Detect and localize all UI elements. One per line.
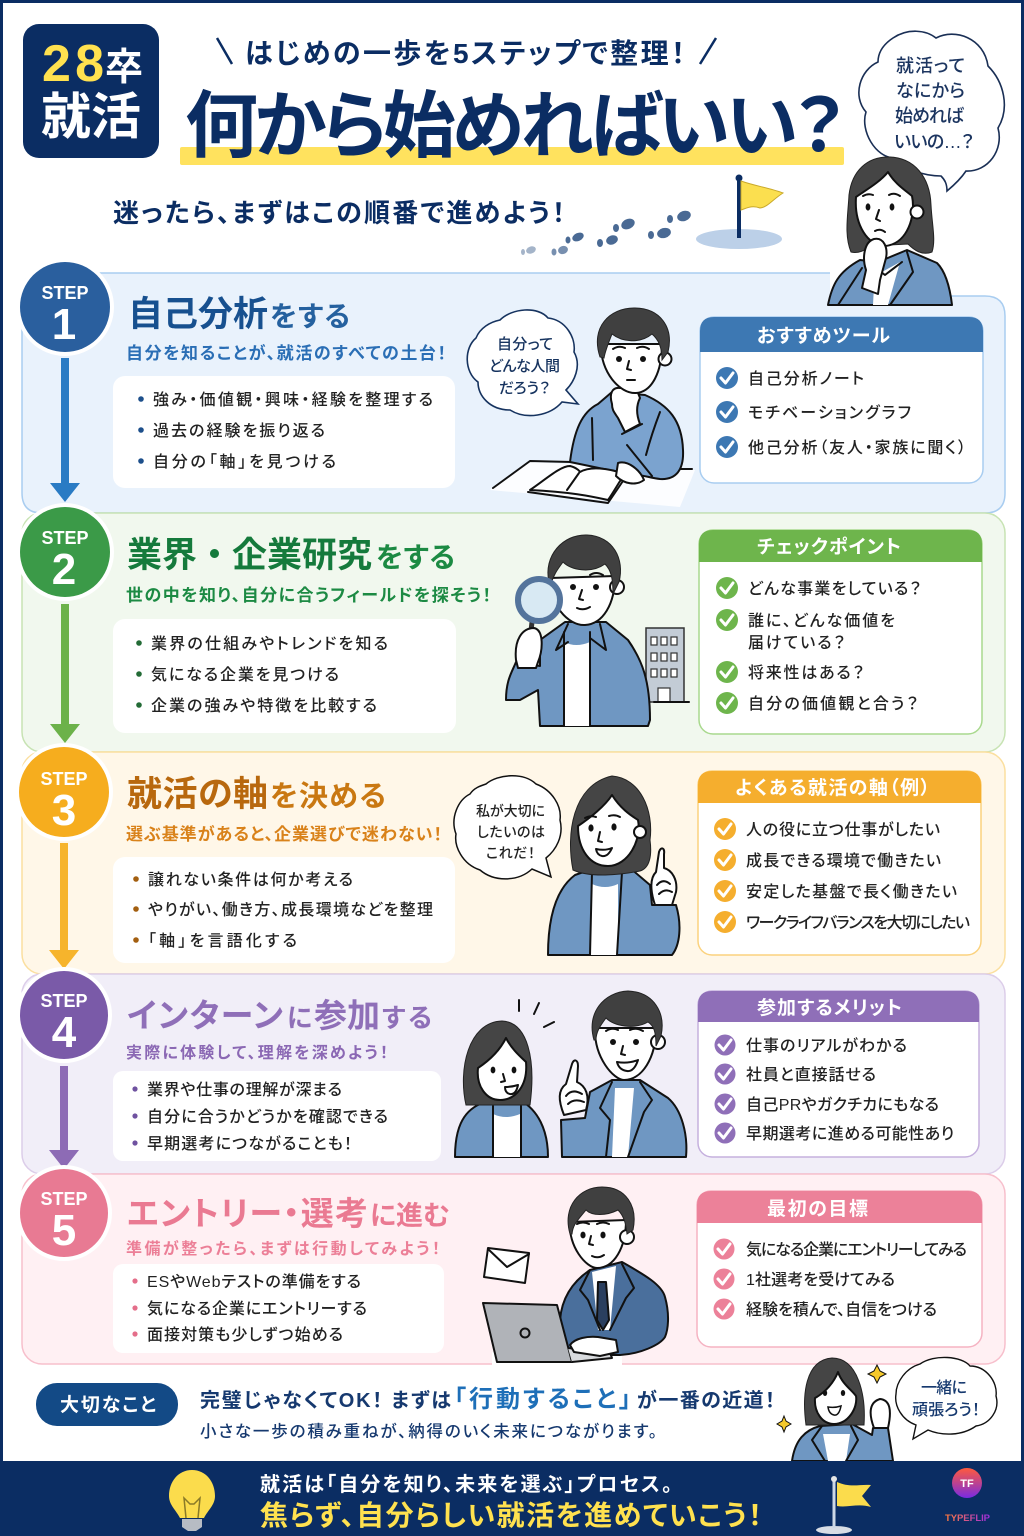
arrow: step 1 to 2 (50, 358, 80, 502)
card: おすすめツール: モチベーショングラフ (748, 404, 911, 422)
panel: step 2 background (22, 513, 1005, 752)
card: よくある就活の軸（例）: 人の役に立つ仕事がしたい (746, 820, 940, 839)
step 1 subheading: 自分を知ることが、就活のすべての土台！ (126, 343, 446, 363)
step 1 list: 自分の「軸」を見つける (153, 453, 336, 471)
panel: step 4 background (22, 974, 1005, 1174)
step 5 list (113, 1264, 444, 1353)
icon: top thought bubble: 就活って (896, 56, 965, 76)
icon: top thought bubble: なにから (896, 81, 965, 101)
step 2 list: 企業の強みや特徴を比較する (151, 697, 377, 715)
badge: 28卒就活 (23, 24, 159, 158)
step 3 list: 譲れない条件は何か考える (148, 871, 353, 889)
step 5 list: ESやWebテストの準備をする (147, 1273, 361, 1291)
icon: bubble 自分ってどんな人間だろう？: だろう？ (499, 380, 550, 397)
step 4 heading: 参加 (314, 997, 380, 1034)
card: よくある就活の軸（例）: よくある就活の軸（例） (735, 777, 930, 799)
title with highlight: 何から始めればいい？ (185, 86, 845, 167)
card: チェックポイント: チェックポイント (757, 535, 901, 558)
step 2 subheading: 世の中を知り、自分に合うフィールドを探そう！ (126, 585, 491, 605)
card: 最初の目標 (697, 1191, 982, 1347)
message: 完璧じゃなくてOK: 小さな一歩の積み重ねが、納得のいく未来につながります。 (200, 1421, 657, 1441)
card: おすすめツール (700, 317, 983, 483)
card: チェックポイント: 自分の価値観と合う？ (748, 695, 918, 713)
icon: bubble 自分ってどんな人間だろう？ (467, 310, 578, 416)
step 3 heading: を決める (270, 780, 386, 813)
step 4 badge: STEP (40, 991, 88, 1011)
icon: footer flag (816, 1476, 871, 1534)
card: 参加するメリット: 仕事のリアルがわかる (746, 1036, 907, 1055)
step 5 heading: に進む (370, 1201, 450, 1231)
step 3 list: やりがい、働き方、成長環境などを整理 (148, 900, 433, 919)
step 3 subheading: 選ぶ基準があると、企業選びで迷わない！ (126, 824, 442, 844)
character: man thinking with book (490, 308, 695, 507)
character: woman and man discussing (455, 991, 686, 1157)
card: チェックポイント: 将来性はある？ (748, 664, 864, 682)
step 5 heading: エントリー・選考 (127, 1195, 368, 1232)
character: man in suit with laptop and envelope (483, 1187, 668, 1366)
step 4 subheading: 実際に体験して、理解を深めよう！ (126, 1044, 388, 1062)
icon: bubble 私が大切にしたいのはこれだ！: 私が大切に (476, 803, 545, 819)
card: 参加するメリット: 自己PRやガクチカにもなる (746, 1096, 939, 1114)
step 4 list (113, 1071, 441, 1161)
step 3 list (113, 857, 455, 963)
step 4 heading: に (287, 1003, 312, 1033)
pill: 大切なこと (36, 1383, 178, 1426)
subtitle: 迷ったら、まずはこの順番で進めよう！ (113, 198, 565, 228)
step 5 badge (16, 1165, 112, 1261)
bubble: 一緒に頑張ろう！: 一緒に (921, 1379, 967, 1397)
card: 参加するメリット: 参加するメリット (757, 997, 902, 1019)
icon: top thought bubble: いいの…？ (894, 132, 974, 152)
card: よくある就活の軸（例）: 安定した基盤で長く働きたい (746, 883, 957, 901)
step 2 heading: 業界・企業研究 (127, 536, 372, 575)
footer message (260, 1473, 762, 1531)
logo: TYPEFLIP (945, 1468, 991, 1524)
step 4 badge (16, 967, 112, 1063)
step 5 badge: STEP (40, 1189, 88, 1209)
step 1 badge: STEP (41, 283, 89, 303)
step 1 heading (128, 295, 350, 334)
step 1 heading: をする (270, 301, 350, 332)
icon: bubble 自分ってどんな人間だろう？: 自分って (497, 336, 553, 353)
icon: bubble 私が大切にしたいのはこれだ！ (454, 776, 561, 879)
step 5 list: 面接対策も少しずつ始める (147, 1326, 343, 1344)
card: チェックポイント (699, 530, 982, 734)
card: 最初の目標: 気になる企業にエントリーしてみる (746, 1241, 967, 1259)
tagline: はじめの一歩を5ステップで整理！ (245, 38, 685, 69)
logo: TYPEFLIP: TF (960, 1478, 974, 1490)
card: 最初の目標: 経験を積んで、自信をつける (746, 1301, 937, 1319)
step 2 list: 気になる企業を見つける (151, 666, 339, 684)
message: 完璧じゃなくてOK: 完璧じゃなくてOK！ まずは (200, 1389, 451, 1412)
icon: bubble 私が大切にしたいのはこれだ！: したいのは (477, 824, 545, 840)
step 2 heading: をする (376, 542, 455, 573)
step 4 list: 早期選考につながることも！ (147, 1134, 352, 1153)
step 1 list (113, 376, 455, 488)
step 1 badge: 1 (52, 300, 76, 349)
step 3 heading: 就活の軸 (127, 775, 268, 814)
message: 完璧じゃなくてOK: が一番の近道！ (637, 1388, 775, 1412)
icon: top thought bubble: 始めれば (895, 106, 965, 126)
pill: 大切なこと: 大切なこと (60, 1394, 156, 1416)
character: thinking woman (828, 157, 952, 305)
character: woman pointing up (548, 776, 679, 955)
step 4 list: 業界や仕事の理解が深まる (147, 1080, 342, 1099)
logo: TYPEFLIP: TYPEFLIP (945, 1513, 991, 1524)
icon: light bulb (169, 1470, 215, 1531)
icon: footprints and goal flag (521, 174, 783, 256)
step 1 heading: 自己分析 (128, 295, 268, 334)
step 1 list: 過去の経験を振り返る (153, 422, 325, 440)
step 2 list (113, 619, 456, 733)
footer band (0, 1461, 1024, 1536)
step 5 list: 気になる企業にエントリーする (147, 1300, 367, 1318)
card: チェックポイント: 誰に、どんな価値を (748, 612, 895, 630)
step 4 heading: インターン (127, 997, 283, 1034)
card: 最初の目標: 1社選考を受けてみる (746, 1270, 895, 1289)
icon: bubble 私が大切にしたいのはこれだ！: これだ！ (486, 845, 535, 861)
panel: step 3 background (22, 752, 1005, 974)
badge: 28卒就活: 28 (42, 35, 104, 93)
card: 参加するメリット: 社員と直接話せる (746, 1066, 876, 1084)
step 2 badge: STEP (41, 528, 89, 548)
step 4 heading: する (382, 1003, 432, 1033)
character: cheering woman with sparkles and bubble (777, 1358, 893, 1461)
step 4 list: 自分に合うかどうかを確認できる (147, 1108, 388, 1126)
bubble: 一緒に頑張ろう！: 頑張ろう！ (912, 1401, 980, 1419)
step 2 badge: 2 (52, 545, 76, 594)
step 1 badge (16, 258, 114, 356)
arrow: step 4 to 5 (49, 1066, 79, 1169)
step 3 list: 「軸」を言語化する (148, 932, 297, 950)
card: よくある就活の軸（例） (698, 771, 981, 955)
panel: step 5 background (22, 1174, 1005, 1364)
step 1 list: 強み・価値観・興味・経験を整理する (153, 391, 433, 409)
step 2 list: 業界の仕組みやトレンドを知る (151, 635, 388, 653)
card: おすすめツール: おすすめツール (757, 325, 890, 347)
footer message: 就活は「自分を知り、未来を選ぶ」プロセス。 (260, 1473, 672, 1496)
message: 完璧じゃなくてOK: 「行動すること」 (454, 1386, 631, 1413)
step 3 badge (15, 743, 113, 841)
panel: step 1 background (22, 273, 1005, 513)
card: おすすめツール: 他己分析（友人・家族に聞く） (748, 439, 966, 457)
card: チェックポイント: 届けている？ (748, 635, 845, 652)
card: おすすめツール: 自己分析ノート (748, 370, 864, 388)
step 3 badge: STEP (40, 769, 88, 789)
message: 完璧じゃなくてOK (200, 1386, 775, 1441)
step 2 badge (16, 503, 114, 601)
icon: bubble 自分ってどんな人間だろう？: どんな人間 (489, 358, 560, 375)
step 4 badge: 4 (52, 1008, 77, 1057)
step 3 badge: 3 (52, 786, 76, 835)
card: チェックポイント: どんな事業をしている？ (748, 580, 921, 598)
arrow: step 2 to 3 (50, 604, 80, 743)
step 5 badge: 5 (52, 1206, 76, 1255)
step 3 heading (127, 775, 386, 814)
arrow: step 3 to 4 (49, 843, 79, 969)
footer message: 焦らず、自分らしい就活を進めていこう！ (260, 1500, 762, 1531)
character: man with magnifying glass and building (506, 535, 689, 726)
bubble: 一緒に頑張ろう！ (896, 1357, 997, 1439)
badge: 28卒就活: 就活 (41, 89, 141, 145)
card: よくある就活の軸（例）: ワークライフバランスを大切にしたい (746, 914, 970, 932)
step 5 subheading: 準備が整ったら、まずは行動してみよう！ (126, 1239, 440, 1258)
card: 最初の目標: 最初の目標 (767, 1198, 868, 1220)
card: 参加するメリット: 早期選考に進める可能性あり (746, 1125, 954, 1143)
badge: 28卒就活: 卒 (105, 47, 143, 89)
card: 参加するメリット (698, 991, 979, 1157)
icon: top thought bubble (859, 31, 1004, 191)
step 4 heading (127, 997, 432, 1034)
card: よくある就活の軸（例）: 成長できる環境で働きたい (746, 852, 941, 870)
